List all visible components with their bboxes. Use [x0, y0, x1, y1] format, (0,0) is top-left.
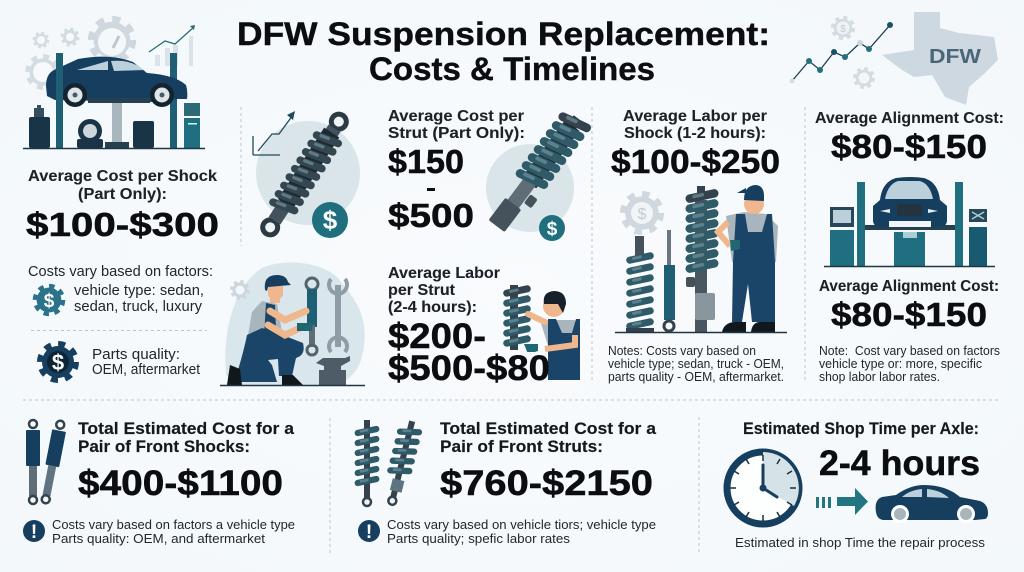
card: average alignment cost top: $80-$150 [831, 128, 987, 165]
icon: pair of front struts [354, 418, 425, 508]
icon: clock [727, 452, 799, 524]
note: front shocks [23, 517, 295, 546]
card: total for front struts: Pair of Front Struts: [440, 437, 603, 456]
notes: alignment [819, 343, 1000, 384]
panel: cost factors: vehicle type: sedan, [74, 283, 204, 299]
panel: cost factors: Parts quality: [92, 347, 180, 363]
arrow [816, 488, 868, 515]
card: average labor per shock: $100-$250 [611, 143, 780, 180]
icon: teal dollar gear [35, 286, 63, 314]
note: front shocks: ! [31, 522, 37, 543]
note: front struts: Costs vary based on vehicle tiors; vehicle type [387, 517, 656, 532]
card: average labor per strut: per Strut [388, 282, 455, 299]
card: average alignment cost lower [819, 278, 999, 333]
panel: cost factors: sedan, truck, luxury [74, 299, 203, 315]
note: front struts: Parts quality; spefic labor rates [387, 531, 571, 546]
heading: shop time: Estimated Shop Time per Axle: [743, 419, 979, 438]
card: average cost per strut: $500 [388, 197, 474, 234]
card: average cost per shock: $100-$300 [26, 206, 219, 243]
icon: teal dollar gear: $ [44, 291, 55, 312]
illustration: Texas map with DFW and trend line: $ [840, 24, 846, 35]
notes: labor per shock: Notes: Costs vary based on [608, 343, 756, 358]
title: DFW Suspension Replacement: [237, 16, 770, 52]
notes: alignment: vehicle type or: more, specific [819, 356, 982, 371]
notes: alignment: Note: Cost vary based on factors [819, 343, 1000, 358]
panel: cost factors [28, 264, 213, 380]
note: front struts [358, 517, 656, 546]
panel: cost factors: OEM, aftermarket [92, 362, 200, 378]
icon: navy dollar gear [40, 344, 76, 380]
card: average alignment cost top: Average Alignment Cost: [815, 110, 1004, 127]
caption: shop time: Estimated in shop Time the repair process [735, 535, 986, 550]
price: labor per strut: $500-$80 [388, 349, 550, 388]
notes: labor per shock: parts quality - OEM, aftermarket. [608, 369, 784, 384]
card: average labor per shock: Shock (1-2 hours): [624, 125, 766, 142]
icon: car [876, 485, 988, 523]
card: total for front struts: $760-$2150 [440, 464, 653, 503]
illustration: mechanic with shock and coil parts [615, 185, 787, 332]
icon: pair of front shocks [26, 419, 68, 505]
notes: alignment: shop labor labor rates. [819, 369, 940, 384]
card: average alignment cost top [815, 110, 1004, 165]
illustration: strut with dollar badge [482, 105, 594, 241]
note: front struts: ! [366, 522, 372, 543]
card: average labor per strut: Average Labor [388, 265, 500, 282]
dashed dividers [23, 107, 1000, 553]
notes: labor per shock: vehicle type; sedan, truck - OEM, [608, 356, 784, 371]
value: shop time: 2-4 hours [819, 444, 980, 483]
panel: cost factors: Costs vary based on factors: [28, 264, 213, 280]
illustration: shock absorber with dollar badge [251, 105, 360, 244]
illustration: Texas map with DFW and trend line [790, 12, 998, 105]
note: front shocks: Costs vary based on factors a vehicle type [52, 517, 295, 532]
price: labor per strut [388, 317, 550, 388]
card: average cost per strut: $150 [388, 143, 464, 180]
title [237, 16, 770, 87]
illustration: mechanic with shock and coil parts: $ [638, 206, 647, 223]
title: Costs & Timelines [369, 51, 655, 87]
notes: labor per shock [608, 343, 784, 384]
card: total for front shocks: $400-$1100 [78, 464, 283, 503]
illustration: mechanic holding strut [500, 285, 580, 384]
icon: navy dollar gear: $ [52, 350, 64, 375]
card: average cost per shock: Average Cost per Shock [28, 168, 217, 185]
card: total for front shocks [78, 419, 295, 503]
illustration: strut with dollar badge: $ [547, 219, 558, 240]
card: average alignment cost lower: Average Alignment Cost: [819, 278, 999, 295]
card: average labor per strut [388, 265, 500, 316]
card: total for front struts [440, 419, 657, 503]
price: labor per strut: $200- [388, 317, 486, 356]
illustration: car on lift in workshop [23, 19, 205, 148]
illustration: alignment rack with car [824, 177, 995, 266]
card: average cost per strut: Average Cost per [388, 108, 524, 125]
illustration: shock absorber with dollar badge: $ [323, 205, 338, 235]
card: total for front struts: Total Estimated Cost for a [440, 419, 657, 438]
note: front shocks: Parts quality: OEM, and aftermarket [52, 531, 265, 546]
illustration: kneeling mechanic with shock [220, 263, 365, 386]
card: average labor per shock [611, 108, 780, 180]
card: average cost per shock [26, 168, 219, 243]
card: average labor per shock: Average Labor per [623, 108, 767, 125]
card: average labor per strut: (2-4 hours): [388, 299, 477, 316]
card: total for front shocks: Total Estimated Cost for a [78, 419, 295, 438]
card: average cost per strut: Strut (Part Only): [388, 125, 525, 142]
card: average cost per shock: (Part Only): [78, 186, 167, 203]
illustration: Texas map with DFW and trend line: DFW [929, 46, 981, 68]
card: average alignment cost lower: $80-$150 [831, 296, 987, 333]
card: average cost per strut [388, 108, 525, 234]
card: total for front shocks: Pair of Front Shocks: [78, 437, 250, 456]
